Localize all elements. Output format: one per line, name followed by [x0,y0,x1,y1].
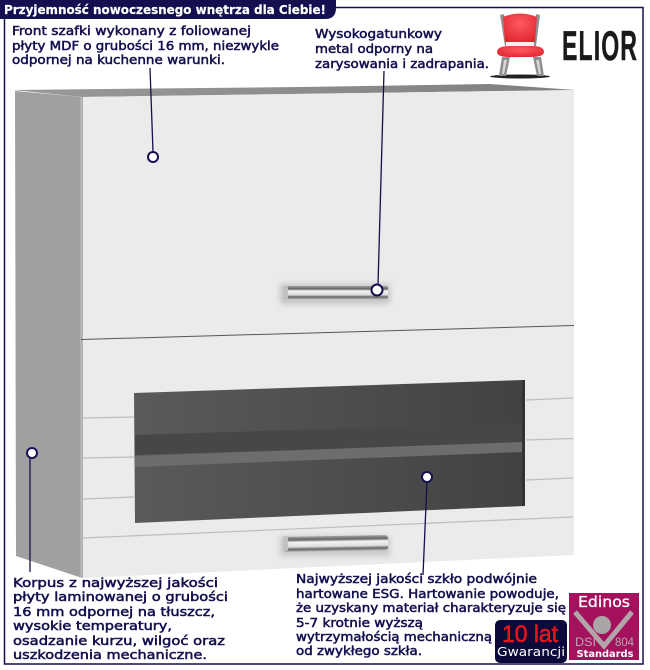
text: glass: od zwykłego szkła. [296,644,422,658]
text: body: płyty laminowanej o grubości [13,590,228,604]
text: metal: Wysokogatunkowy [315,27,442,41]
text: metal: zarysowania i zadrapania. [315,57,489,71]
cabinet [13,84,575,578]
badge: Edinos standards: Standards [576,649,634,660]
text: front: płyty MDF o grubości 16 mm, niezwykle [12,39,279,53]
badge: Edinos standards: 804 [615,635,634,649]
badge: Edinos standards: Edinos [578,593,630,611]
text: glass: 5-7 krotnie wyższą [296,616,423,630]
text: front: Front szafki wykonany z foliowanej [12,24,251,38]
pointer dots [27,152,432,482]
upper door seam [81,326,574,340]
logo: ELIOR: ELIOR [562,23,638,70]
shelf lines [83,398,573,538]
icon: red chair [490,14,550,78]
text: glass: Najwyższej jakości szkło podwójnie [296,572,537,586]
cabinet front [83,90,574,578]
header text: Przyjemność nowoczesnego wnętrza dla Ciebie! [4,3,326,17]
text: metal: metal odporny na [315,42,433,56]
text: body: uszkodzenia mechaniczne. [13,648,207,662]
badge: 10 lat warranty: Gwarancji [497,645,565,659]
cabinet side panel [15,91,82,578]
text: body: 16 mm odpornej na tłuszcz, [13,605,215,619]
lower handle [280,535,390,556]
glass panel [134,380,525,523]
text: body: osadzanie kurzu, wilgoć oraz [13,634,225,648]
badge: Edinos standards [569,593,639,660]
text: body: wysokie temperatury, [13,619,172,633]
pointer lines [30,68,427,575]
badge: 10 lat warranty [495,620,567,663]
text: body: Korpus z najwyższej jakości [13,576,218,590]
header tab [0,0,336,19]
text: glass: wytrzymałością mechaniczną [296,630,492,644]
text: front: odpornej na kuchenne warunki. [12,53,225,67]
text: glass: hartowane ESG. Hartowanie powoduje, [296,587,559,601]
cabinet top [13,84,575,97]
text: glass: że uzyskany materiał charakteryzuje się [296,601,566,615]
badge: 10 lat warranty: 10 lat [502,621,558,648]
badge: Edinos standards: DSI [575,635,596,649]
upper handle [280,284,390,304]
